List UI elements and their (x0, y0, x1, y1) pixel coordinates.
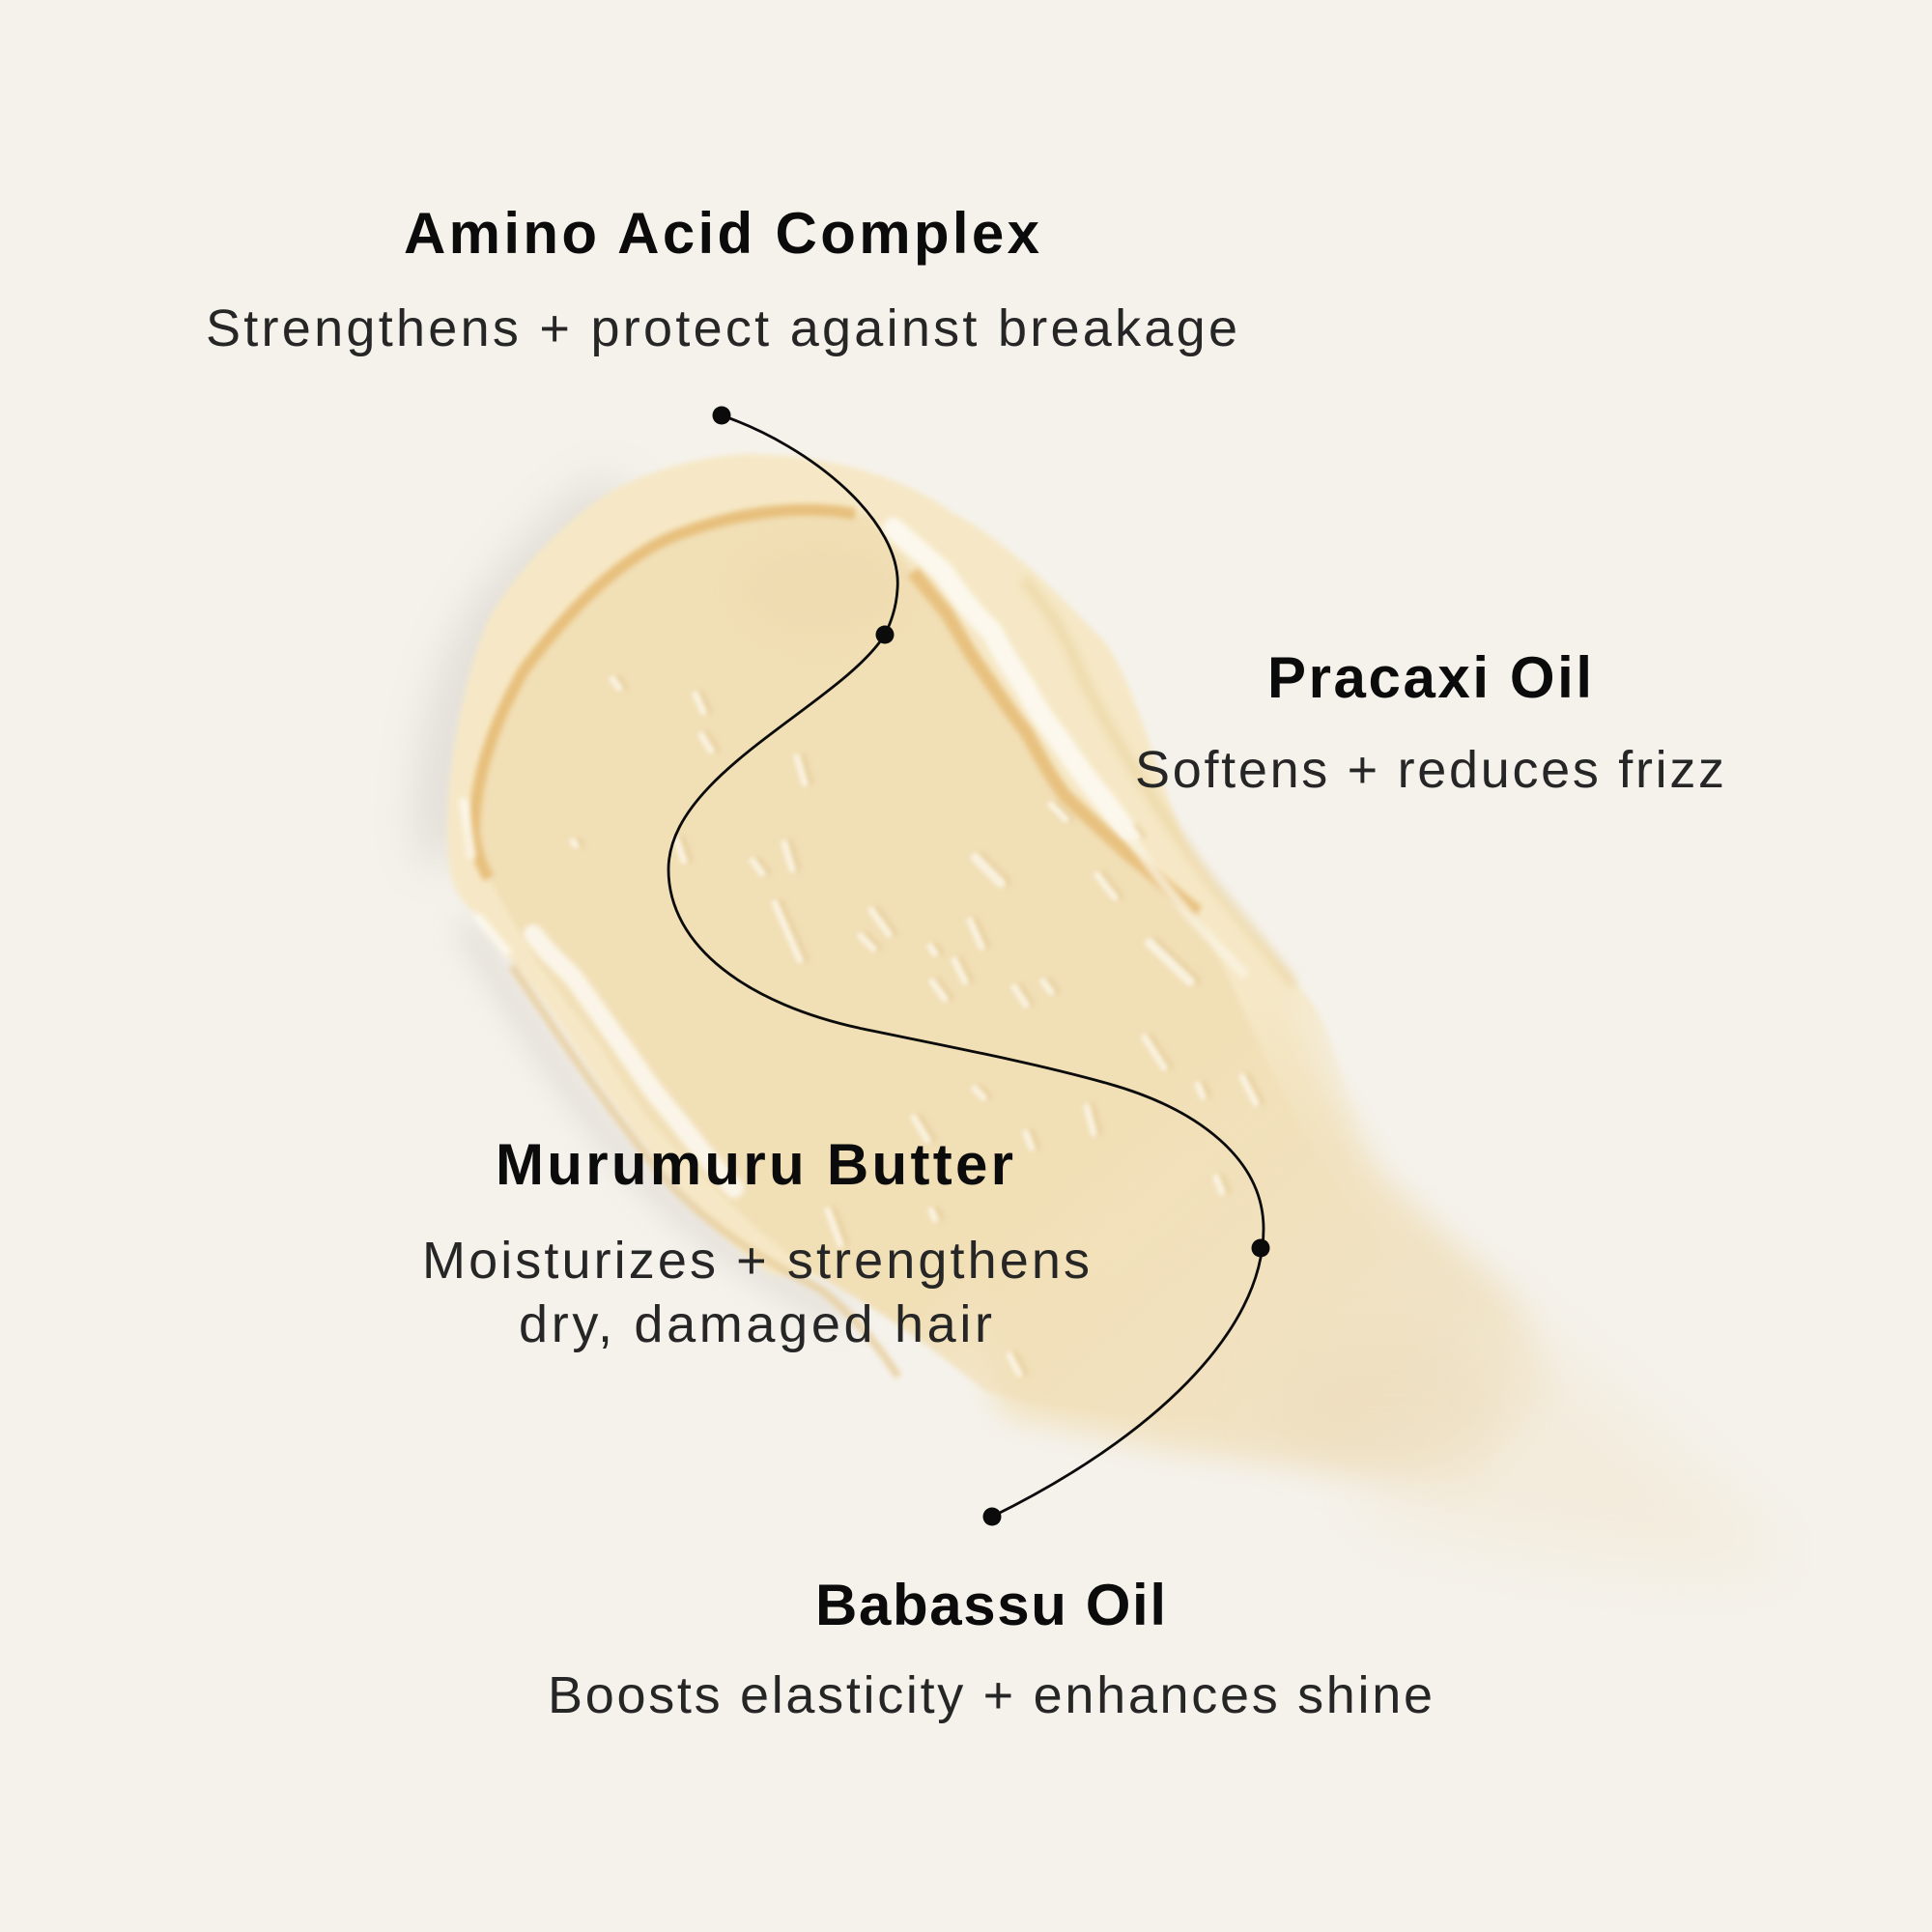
outer right crease (1024, 580, 1294, 985)
texture flecks (573, 679, 1256, 1374)
dot: pracaxi (875, 626, 895, 643)
dot: murumuru (1252, 1238, 1269, 1258)
dot: amino acid (713, 406, 730, 425)
right ridge shadow (913, 572, 1198, 912)
lower left highlight (533, 934, 734, 1188)
inner pressed surface (474, 507, 1402, 1419)
heading: Babassu Oil (815, 1573, 1166, 1637)
inner ridge shading (474, 510, 855, 878)
cream swatch (441, 454, 1797, 1573)
connector curve with dots (668, 406, 1269, 1526)
callout: amino acid complex (206, 201, 1237, 357)
description: Softens + reduces frizz (1135, 741, 1724, 799)
warm tone on smear (1270, 1338, 1502, 1463)
description: Boosts elasticity + enhances shine (548, 1666, 1433, 1724)
callout: murumuru butter (422, 1132, 1090, 1353)
left lip highlight (464, 802, 507, 952)
lower left edge crease (512, 966, 898, 1377)
swatch faint far tail (1352, 1256, 1797, 1573)
warm tone on surface (734, 536, 908, 642)
dot: babassu (983, 1507, 1001, 1526)
callout: babassu oil (548, 1573, 1433, 1724)
heading: Murumuru Butter (496, 1132, 1013, 1197)
description line 1: Moisturizes + strengthens (422, 1232, 1090, 1290)
swatch shadow upper left (441, 493, 618, 860)
swatch solid lip (447, 454, 1362, 1275)
swatch smear tail (966, 966, 1552, 1488)
heading: Amino Acid Complex (404, 201, 1039, 266)
heading: Pracaxi Oil (1267, 645, 1592, 710)
callout: pracaxi oil (1135, 645, 1724, 799)
swatch shadow lower left (464, 923, 850, 1319)
description line 2: dry, damaged hair (519, 1295, 992, 1353)
description: Strengthens + protect against breakage (206, 299, 1237, 357)
right ridge highlight (894, 528, 1125, 831)
texture fleck shadows (579, 678, 1262, 1373)
outer right highlight (1121, 821, 1246, 976)
